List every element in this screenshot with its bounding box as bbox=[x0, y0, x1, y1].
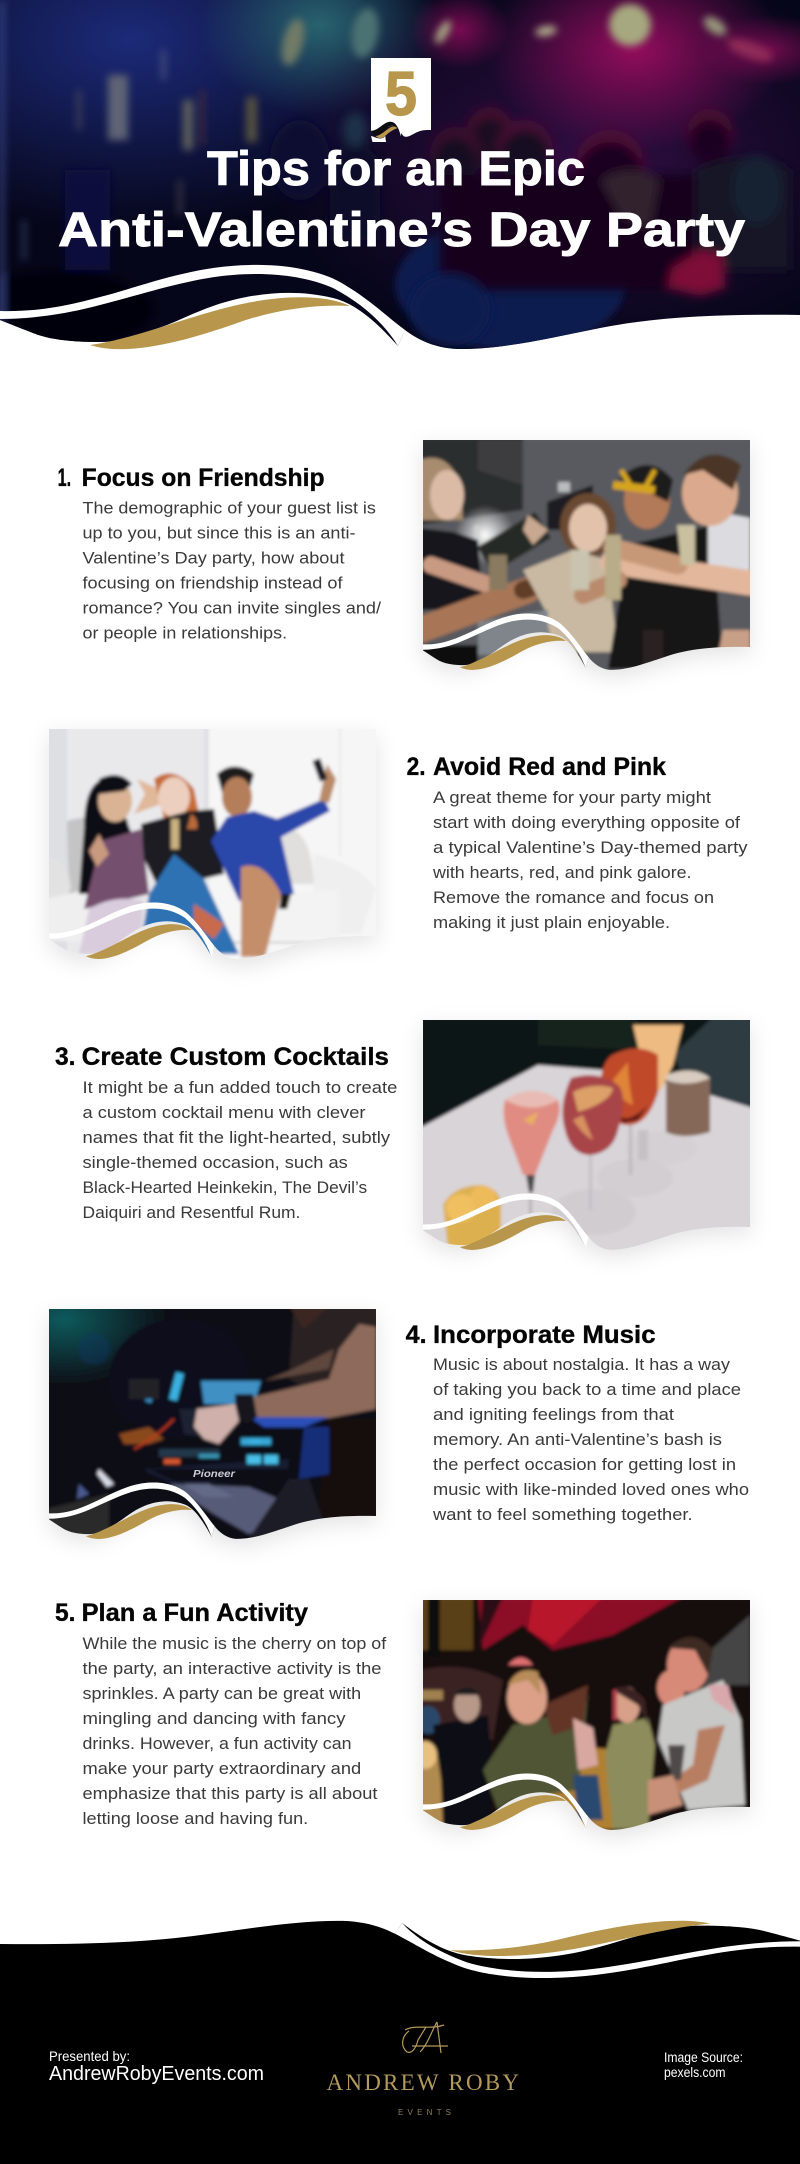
panel: tip 4 photo, DJ mixer bbox=[44, 1309, 382, 1550]
title bbox=[58, 143, 745, 257]
presented by: Presented by: bbox=[49, 2048, 130, 2064]
body 5: drinks. However, a fun activity can bbox=[82, 1735, 352, 1753]
panel: tip 1 photo, friends toasting bbox=[420, 437, 753, 673]
panel: tip 3 photo, cocktails bbox=[420, 1017, 753, 1253]
body 3: a custom cocktail menu with clever bbox=[82, 1104, 366, 1122]
body 4 bbox=[432, 1356, 749, 1524]
panel: tip 2 photo, selfie on sofa bbox=[46, 726, 379, 962]
image source: pexels.com bbox=[664, 2065, 726, 2080]
wave overlay bbox=[423, 1193, 589, 1250]
body 2: A great theme for your party might bbox=[433, 789, 711, 807]
logo wordmark bbox=[326, 2070, 519, 2117]
body 3: names that fit the light-hearted, subtly bbox=[82, 1129, 391, 1147]
heading 4: Incorporate Music bbox=[433, 1321, 656, 1349]
panel: tip 3 text bbox=[55, 1043, 397, 1222]
mixer brand label: Pioneer bbox=[193, 1469, 236, 1480]
title: Tips for an Epic bbox=[207, 143, 585, 196]
body 5: emphasize that this party is all about bbox=[82, 1785, 378, 1803]
footer wave bbox=[0, 1921, 800, 2158]
body 1: The demographic of your guest list is bbox=[82, 500, 376, 518]
heading 3: 3. bbox=[55, 1043, 76, 1071]
body 1 bbox=[82, 500, 381, 643]
badge with number 5: 5 bbox=[385, 60, 417, 129]
body 4: want to feel something together. bbox=[432, 1506, 693, 1524]
body 2: making it just plain enjoyable. bbox=[433, 914, 670, 932]
body 3: single-themed occasion, such as bbox=[82, 1154, 348, 1172]
footer band bbox=[0, 1921, 800, 2164]
body 4: of taking you back to a time and place bbox=[433, 1381, 741, 1399]
title: Anti-Valentine’s Day Party bbox=[58, 204, 745, 257]
wave overlay bbox=[423, 1773, 589, 1830]
image source bbox=[664, 2050, 743, 2080]
body 3: It might be a fun added touch to create bbox=[82, 1079, 397, 1097]
logo bbox=[326, 2022, 519, 2117]
logo monogram bbox=[403, 2022, 448, 2053]
panel: tip 5 text bbox=[55, 1599, 387, 1828]
body 4: the perfect occasion for getting lost in bbox=[433, 1456, 736, 1474]
body 2: a typical Valentine’s Day-themed party bbox=[433, 839, 748, 857]
badge with number 5 bbox=[371, 58, 431, 142]
wave overlay bbox=[423, 613, 589, 670]
body 1: Valentine’s Day party, how about bbox=[82, 550, 345, 568]
header photo bbox=[0, 0, 800, 350]
body 5: letting loose and having fun. bbox=[82, 1810, 308, 1828]
panel: tip 5 photo, dancing group bbox=[413, 1597, 753, 1833]
heading 3: Create Custom Cocktails bbox=[82, 1043, 389, 1071]
wave overlay bbox=[49, 902, 215, 959]
body 3: Black-Hearted Heinkekin, The Devil’s bbox=[82, 1179, 367, 1197]
panel: tip 4 text bbox=[406, 1321, 749, 1524]
body 5: sprinkles. A party can be great with bbox=[82, 1685, 361, 1703]
header: party photo banner bbox=[0, 0, 800, 350]
body 3: Daiquiri and Resentful Rum. bbox=[82, 1204, 300, 1222]
body 2: with hearts, red, and pink galore. bbox=[432, 864, 692, 882]
wave overlay bbox=[49, 1482, 215, 1539]
heading 1: 1. bbox=[58, 464, 71, 492]
header wave with gold swoosh bbox=[0, 265, 405, 349]
body 5: mingling and dancing with fancy bbox=[82, 1710, 346, 1728]
presented by bbox=[49, 2048, 264, 2085]
presented by: AndrewRobyEvents.com bbox=[49, 2063, 264, 2085]
body 4: and igniting feelings from that bbox=[433, 1406, 674, 1424]
heading 2: 2. bbox=[407, 753, 426, 781]
body 5: make your party extraordinary and bbox=[82, 1760, 361, 1778]
body 1: or people in relationships. bbox=[82, 625, 287, 643]
heading 4: 4. bbox=[406, 1321, 427, 1349]
body 2 bbox=[432, 789, 748, 932]
body 5: While the music is the cherry on top of bbox=[82, 1635, 387, 1653]
image source: Image Source: bbox=[664, 2050, 743, 2065]
heading 5: 5. bbox=[55, 1599, 76, 1627]
heading 2: Avoid Red and Pink bbox=[433, 753, 666, 781]
body 2: start with doing everything opposite of bbox=[433, 814, 740, 832]
body 4: music with like-minded loved ones who bbox=[433, 1481, 749, 1499]
body 4: Music is about nostalgia. It has a way bbox=[433, 1356, 731, 1374]
body 5 bbox=[82, 1635, 387, 1828]
body 3 bbox=[82, 1079, 397, 1222]
heading 5: Plan a Fun Activity bbox=[82, 1599, 308, 1627]
panel: tip 1 text bbox=[58, 464, 381, 643]
body 1: romance? You can invite singles and/ bbox=[82, 600, 381, 618]
body 2: Remove the romance and focus on bbox=[433, 889, 714, 907]
body 1: focusing on friendship instead of bbox=[82, 575, 343, 593]
logo wordmark: ANDREW ROBY bbox=[326, 2070, 519, 2095]
body 5: the party, an interactive activity is the bbox=[82, 1660, 382, 1678]
panel: tip 2 text bbox=[407, 753, 748, 932]
logo wordmark: EVENTS bbox=[398, 2108, 451, 2117]
heading 1: Focus on Friendship bbox=[82, 464, 325, 492]
body 4: memory. An anti-Valentine’s bash is bbox=[433, 1431, 722, 1449]
body 1: up to you, but since this is an anti- bbox=[82, 525, 356, 543]
